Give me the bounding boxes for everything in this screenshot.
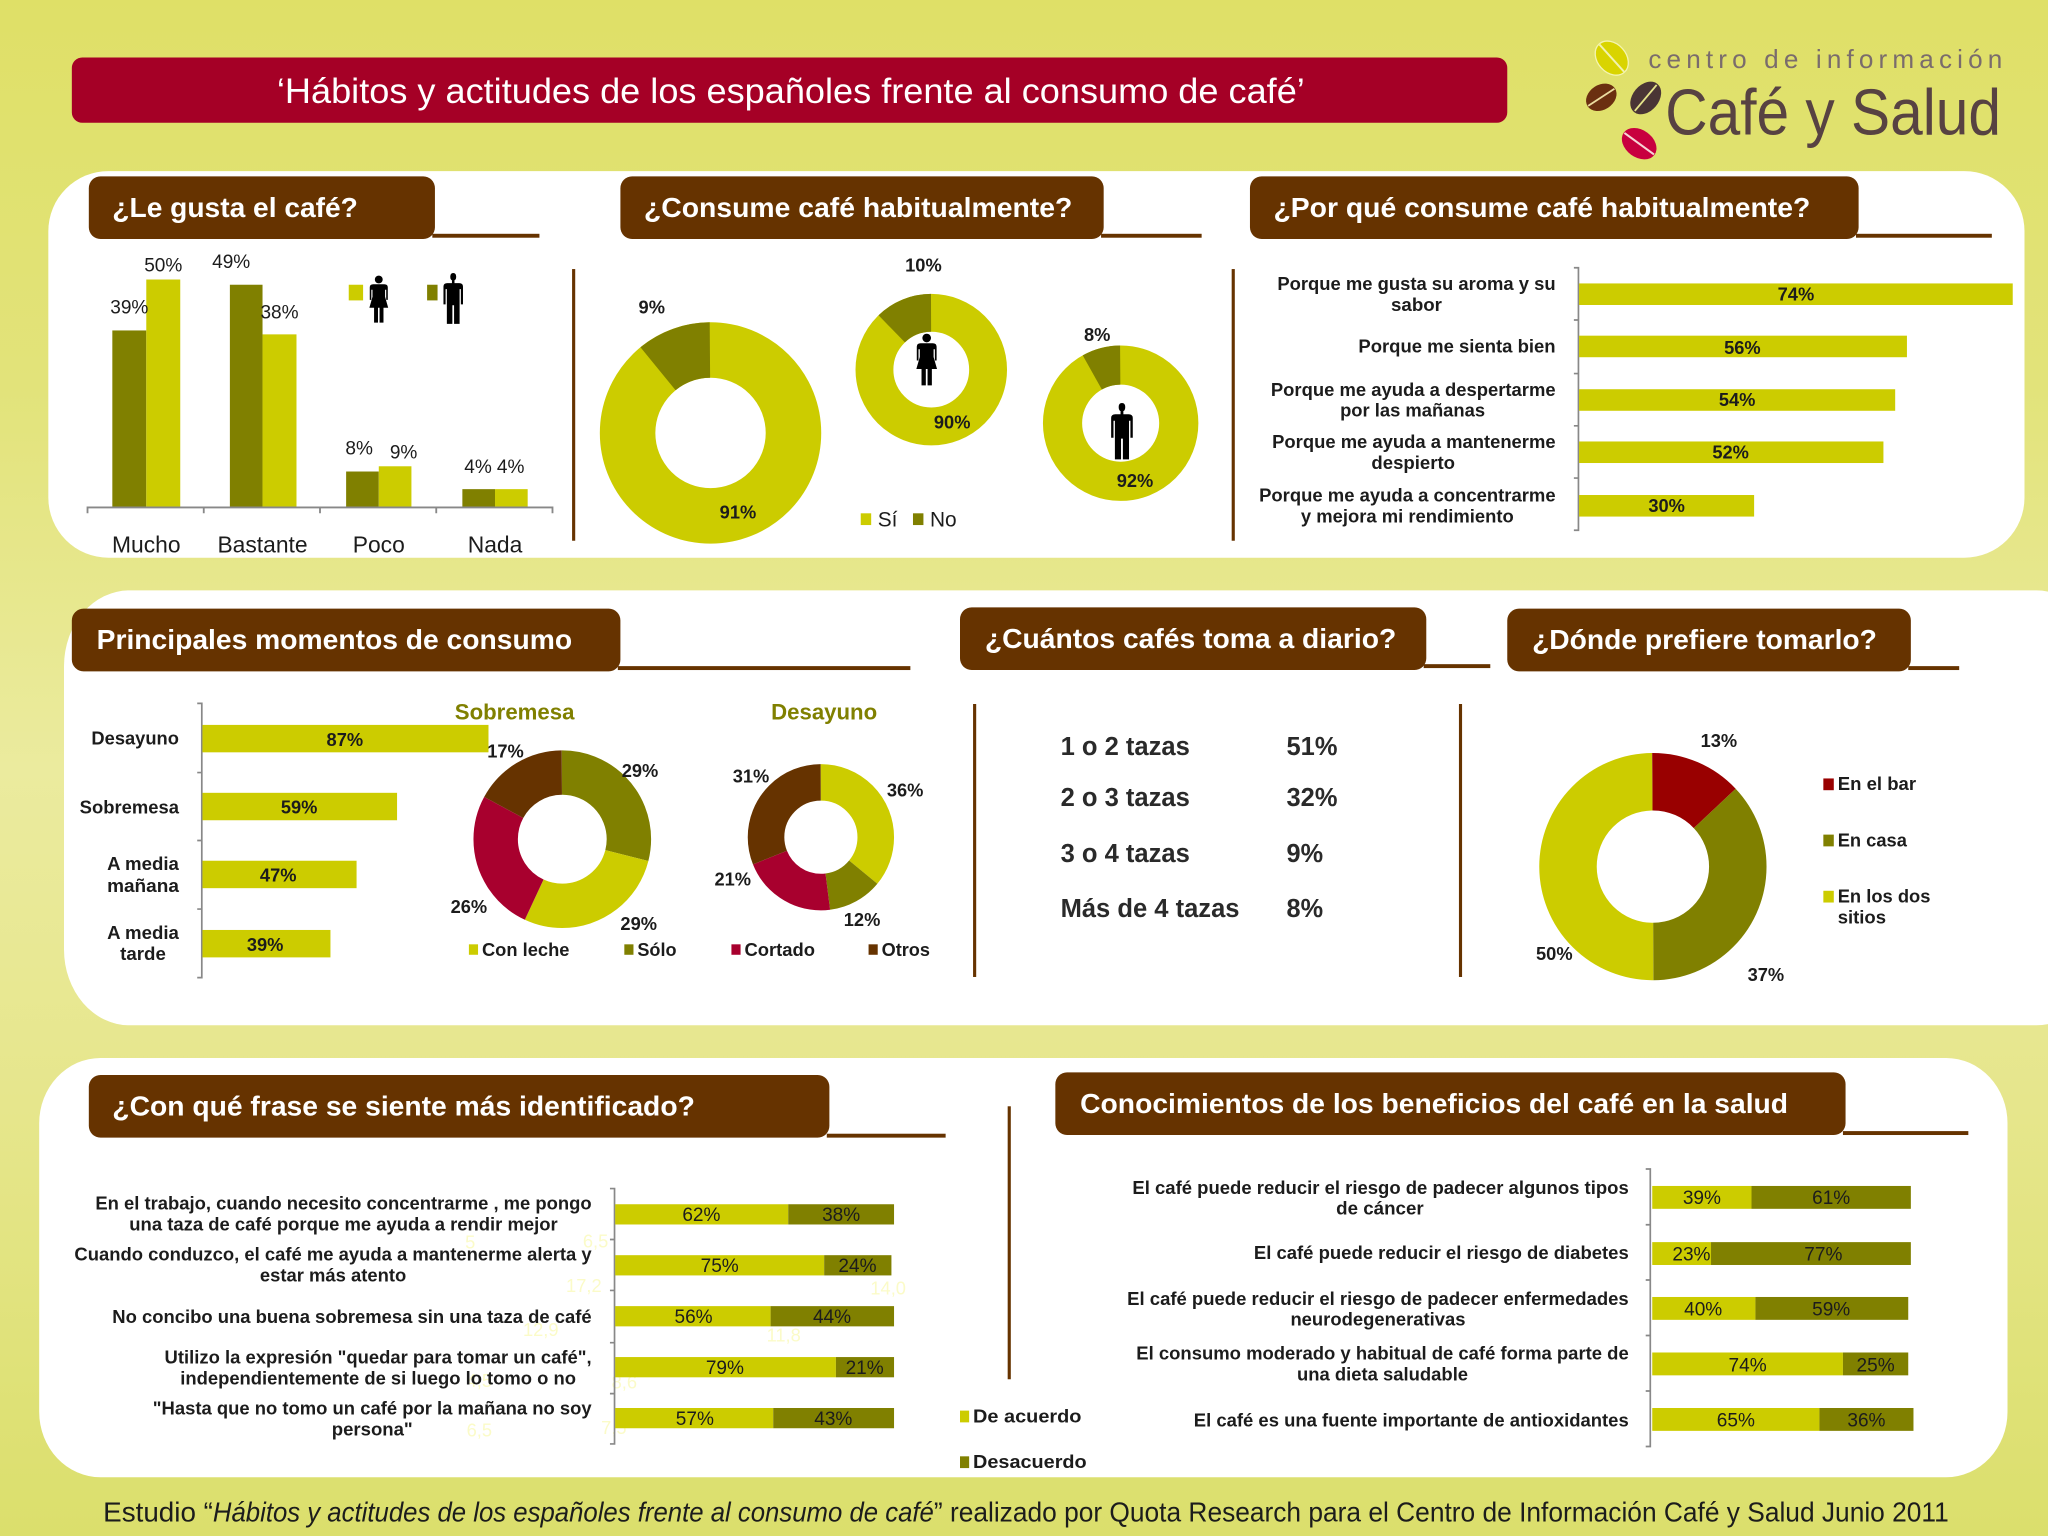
title banner — [72, 57, 1507, 123]
bar chart: momentos de consumo: tarde — [120, 943, 166, 964]
bar chart: le gusta el café por sexo: 39% — [110, 297, 148, 318]
stacked bar chart: frases: 24% — [838, 1256, 877, 1277]
stacked bar chart: frases: 21% — [846, 1358, 884, 1379]
legend: de acuerdo / desacuerdo — [960, 1405, 1087, 1472]
stacked bar chart: frases: 79% — [706, 1358, 744, 1379]
stacked bar chart: frases: Utilizo la expresión "quedar para tomar un café", — [165, 1347, 592, 1368]
stacked bar chart: beneficios — [1127, 1169, 1913, 1447]
bar chart: le gusta el café por sexo: 4% — [464, 457, 492, 478]
donut chart: total — [628, 296, 793, 523]
bar chart: momentos de consumo: 47% — [260, 865, 296, 886]
stacked bar chart: frases: una taza de café porque me ayuda a rendir mejor — [129, 1213, 558, 1234]
table: tazas diarias: 1 o 2 tazas — [1061, 733, 1190, 761]
donut chart: Sobremesa: Sobremesa — [455, 700, 575, 725]
heading: Dónde prefiere tomarlo: ¿Dónde prefiere tomarlo? — [1532, 624, 1877, 655]
table: tazas diarias: 2 o 3 tazas — [1061, 784, 1190, 812]
stacked bar chart: beneficios: 77% — [1804, 1244, 1842, 1265]
stacked bar chart: beneficios: El café es una fuente importante de antioxidantes — [1194, 1409, 1629, 1430]
footer source note: Hábitos y actitudes de los españoles frente al consumo de café — [213, 1497, 934, 1528]
bar chart: motivos de consumo: por las mañanas — [1340, 400, 1485, 421]
bar chart: le gusta el café por sexo: Mucho — [112, 531, 181, 557]
bar chart: motivos de consumo: Porque me sienta bien — [1358, 336, 1556, 357]
legend: tipo de café: Sólo — [637, 939, 677, 960]
bar chart: momentos de consumo — [80, 703, 488, 978]
legend: de acuerdo / desacuerdo: De acuerdo — [973, 1405, 1081, 1426]
donut chart: dónde prefiere tomarlo: 13% — [1701, 730, 1737, 751]
bar chart: motivos de consumo: Porque me ayuda a concentrarme — [1259, 485, 1556, 506]
donut chart: mujeres: 10% — [905, 255, 942, 276]
donut chart: Desayuno: 12% — [844, 909, 880, 930]
donut chart: Sobremesa: 17% — [487, 741, 524, 762]
table: tazas diarias — [1061, 733, 1337, 923]
divider line — [1232, 269, 1235, 541]
bar chart: motivos de consumo: 54% — [1719, 389, 1755, 410]
donut chart: Sobremesa: 26% — [451, 896, 487, 917]
legend: tipo de café: Con leche — [482, 939, 569, 960]
stacked bar chart: frases: 57% — [676, 1409, 714, 1430]
bar chart: motivos de consumo — [1259, 268, 2013, 530]
bar chart: motivos de consumo: Porque me ayuda a mantenerme — [1272, 431, 1556, 452]
stacked bar chart: beneficios: El café puede reducir el riesgo de diabetes — [1254, 1242, 1629, 1263]
faint stray numbers: 7,5 — [601, 1417, 627, 1438]
donut chart: dónde prefiere tomarlo: 50% — [1536, 943, 1573, 964]
bar chart: le gusta el café por sexo: 4% — [497, 457, 525, 478]
divider line — [1459, 704, 1462, 977]
donut chart: Desayuno: 36% — [887, 780, 923, 801]
heading: Consume café habitualmente — [620, 176, 1202, 239]
bar chart: motivos de consumo: 56% — [1724, 337, 1761, 358]
faint stray numbers: 6,5 — [467, 1420, 492, 1441]
heading: Con qué frase se siente más identificado — [89, 1075, 946, 1138]
legend: lugar: En casa — [1838, 829, 1908, 850]
bar chart: le gusta el café por sexo: Bastante — [217, 531, 308, 557]
stacked bar chart: frases: En el trabajo, cuando necesito concentrarme , me pongo — [95, 1192, 592, 1213]
stacked bar chart: beneficios: 36% — [1847, 1410, 1886, 1431]
donut chart: Sobremesa: 29% — [620, 913, 657, 934]
legend: sí / no — [861, 508, 957, 531]
stacked bar chart: beneficios: 39% — [1683, 1188, 1721, 1209]
heading: Principales momentos de consumo: Principales momentos de consumo — [97, 624, 572, 655]
stacked bar chart: beneficios: 74% — [1729, 1355, 1767, 1376]
legend: lugar: En el bar — [1838, 773, 1916, 794]
bar chart: le gusta el café por sexo: Nada — [468, 531, 523, 557]
bar chart: momentos de consumo: mañana — [107, 875, 180, 896]
table: tazas diarias: Más de 4 tazas — [1061, 895, 1240, 923]
donut chart: mujeres: 90% — [934, 411, 970, 432]
stacked bar chart: beneficios: 25% — [1857, 1355, 1895, 1376]
bar chart: momentos de consumo: A media — [107, 922, 180, 943]
faint stray numbers: 4,5 — [467, 1370, 492, 1391]
legend: tipo de café: Otros — [882, 939, 930, 960]
donut chart: hombres: 92% — [1117, 470, 1153, 491]
bar chart: momentos de consumo: A media — [107, 853, 180, 874]
stacked bar chart: frases: 44% — [813, 1307, 851, 1328]
logo: Café y Salud: centro de información — [1648, 44, 2002, 74]
bar chart: le gusta el café por sexo: 50% — [144, 256, 182, 277]
stacked bar chart: frases: 43% — [814, 1409, 852, 1430]
bar chart: momentos de consumo: Sobremesa — [80, 797, 180, 818]
donut chart: hombres — [1063, 324, 1179, 491]
legend: tipo de café: Cortado — [744, 939, 815, 960]
stacked bar chart: frases: 56% — [674, 1307, 713, 1328]
heading: Cuántos cafés toma a diario — [960, 607, 1490, 670]
table: tazas diarias: 51% — [1287, 733, 1337, 761]
stacked bar chart: frases: Cuando conduzco, el café me ayuda a mantenerme alerta y — [74, 1243, 593, 1264]
faint stray numbers: 6,5 — [583, 1230, 608, 1251]
donut chart: dónde prefiere tomarlo: 37% — [1748, 964, 1784, 985]
stacked bar chart: frases: 75% — [701, 1256, 739, 1277]
heading: Dónde prefiere tomarlo — [1507, 609, 1959, 671]
legend: sí / no: No — [930, 508, 957, 531]
faint stray numbers: 17,2 — [566, 1275, 602, 1296]
stacked bar chart: beneficios: El café puede reducir el riesgo de padecer enfermedades — [1127, 1288, 1629, 1309]
faint stray numbers: 11,8 — [767, 1324, 801, 1345]
panel: top row — [48, 171, 2024, 558]
footer source note: Estudio “ — [103, 1497, 213, 1528]
donut chart: total: 91% — [720, 502, 756, 523]
legend: lugar — [1823, 773, 1930, 927]
faint stray numbers: 5 — [465, 1232, 475, 1253]
stacked bar chart: beneficios: una dieta saludable — [1297, 1364, 1468, 1385]
divider line — [1008, 1106, 1011, 1379]
bar chart: motivos de consumo: y mejora mi rendimiento — [1301, 505, 1514, 526]
table: tazas diarias: 32% — [1287, 784, 1337, 812]
panel: middle row — [64, 590, 2048, 1025]
legend: lugar: sitios — [1838, 906, 1886, 927]
donut chart: Desayuno — [714, 700, 923, 930]
divider line — [973, 704, 976, 977]
heading: Cuántos cafés toma a diario: ¿Cuántos cafés toma a diario? — [985, 623, 1396, 654]
bar chart: motivos de consumo: despierto — [1371, 452, 1455, 473]
bar chart: motivos de consumo: 74% — [1778, 283, 1814, 304]
stacked bar chart: frases: 62% — [682, 1205, 721, 1226]
stacked bar chart: beneficios: El consumo moderado y habitual de café forma parte de — [1136, 1343, 1629, 1364]
bar chart: motivos de consumo: Porque me ayuda a despertarme — [1271, 379, 1556, 400]
logo: Café y Salud: Café y Salud — [1665, 76, 2001, 149]
stacked bar chart: frases: persona" — [332, 1418, 413, 1439]
faint stray numbers: 14,0 — [870, 1277, 906, 1298]
bar chart: le gusta el café por sexo: 9% — [390, 442, 417, 463]
donut chart: hombres: 8% — [1084, 324, 1110, 345]
stacked bar chart: beneficios: de cáncer — [1336, 1198, 1424, 1219]
bar chart: le gusta el café por sexo: 8% — [345, 439, 373, 460]
legend: tipo de café — [469, 939, 930, 960]
bar chart: motivos de consumo: Porque me gusta su aroma y su — [1277, 273, 1556, 294]
faint stray numbers: 12,9 — [523, 1319, 559, 1340]
heading: Con qué frase se siente más identificado: ¿Con qué frase se siente más identificado? — [112, 1090, 695, 1121]
stacked bar chart: beneficios: 23% — [1672, 1244, 1711, 1265]
donut chart: Sobremesa: 29% — [622, 760, 658, 781]
table: tazas diarias: 3 o 4 tazas — [1061, 840, 1190, 868]
bar chart: motivos de consumo: 52% — [1712, 441, 1749, 462]
legend: mujer y hombre — [349, 273, 463, 324]
heading: Por qué consume café — [1250, 176, 1992, 239]
footer source note — [103, 1497, 1949, 1528]
faint stray numbers — [465, 1230, 906, 1441]
donut chart: dónde prefiere tomarlo — [1536, 730, 1784, 985]
legend: lugar: En los dos — [1838, 886, 1930, 907]
heading: Le gusta el café — [89, 176, 539, 239]
stacked bar chart: beneficios: 61% — [1812, 1188, 1850, 1209]
donut chart: Sobremesa — [451, 700, 658, 934]
legend: de acuerdo / desacuerdo: Desacuerdo — [973, 1451, 1087, 1472]
faint stray numbers: 8,6 — [612, 1371, 637, 1392]
bar chart: le gusta el café por sexo: 49% — [212, 252, 250, 273]
stacked bar chart: frases — [74, 1189, 894, 1444]
stacked bar chart: beneficios: 40% — [1684, 1299, 1722, 1320]
logo: Café y Salud — [1581, 34, 2002, 166]
stacked bar chart: frases: estar más atento — [260, 1264, 406, 1285]
bar chart: momentos de consumo: 87% — [327, 729, 363, 750]
stacked bar chart: beneficios: El café puede reducir el riesgo de padecer algunos tipos — [1132, 1177, 1629, 1198]
bar chart: le gusta el café por sexo: Poco — [353, 531, 405, 557]
donut chart: mujeres — [874, 255, 988, 432]
stacked bar chart: frases: independientemente de si luego lo tomo o no — [180, 1367, 576, 1388]
footer source note: ” realizado por Quota Research para el Centro de Información Café y Salud Junio 2011 — [934, 1497, 1949, 1528]
panel: bottom row — [39, 1058, 2008, 1477]
bar chart: momentos de consumo: 59% — [281, 797, 317, 818]
heading: Le gusta el café: ¿Le gusta el café? — [112, 192, 358, 223]
title banner: ‘Hábitos y actitudes de los españoles frente al consumo de café’ — [277, 72, 1305, 111]
stacked bar chart: beneficios: 59% — [1812, 1299, 1850, 1320]
heading: Conocimientos de los beneficios — [1055, 1072, 1968, 1135]
heading: Conocimientos de los beneficios: Conocimientos de los beneficios del café en la salud — [1080, 1088, 1788, 1119]
divider line — [572, 269, 575, 541]
donut chart: total: 9% — [639, 296, 665, 317]
bar chart: le gusta el café por sexo — [88, 252, 552, 557]
donut chart: Desayuno: 21% — [714, 869, 751, 890]
heading: Consume café habitualmente: ¿Consume café habitualmente? — [644, 192, 1072, 223]
stacked bar chart: beneficios: 65% — [1717, 1410, 1755, 1431]
stacked bar chart: frases: No concibo una buena sobremesa sin una taza de café — [112, 1306, 592, 1327]
table: tazas diarias: 8% — [1287, 895, 1323, 923]
stacked bar chart: frases: "Hasta que no tomo un café por la mañana no soy — [153, 1398, 593, 1419]
donut chart: Desayuno: 31% — [733, 765, 769, 786]
table: tazas diarias: 9% — [1287, 840, 1323, 868]
heading: Principales momentos de consumo — [72, 609, 910, 671]
bar chart: motivos de consumo: 30% — [1648, 495, 1685, 516]
bar chart: motivos de consumo: sabor — [1391, 294, 1442, 315]
bar chart: le gusta el café por sexo: 38% — [260, 303, 299, 324]
heading: Por qué consume café: ¿Por qué consume café habitualmente? — [1273, 192, 1810, 223]
legend: sí / no: Sí — [878, 508, 898, 531]
bar chart: momentos de consumo: Desayuno — [91, 727, 179, 748]
stacked bar chart: frases: 38% — [822, 1205, 860, 1226]
stacked bar chart: beneficios: neurodegenerativas — [1290, 1309, 1465, 1330]
bar chart: momentos de consumo: 39% — [247, 934, 283, 955]
donut chart: Desayuno: Desayuno — [771, 700, 877, 725]
